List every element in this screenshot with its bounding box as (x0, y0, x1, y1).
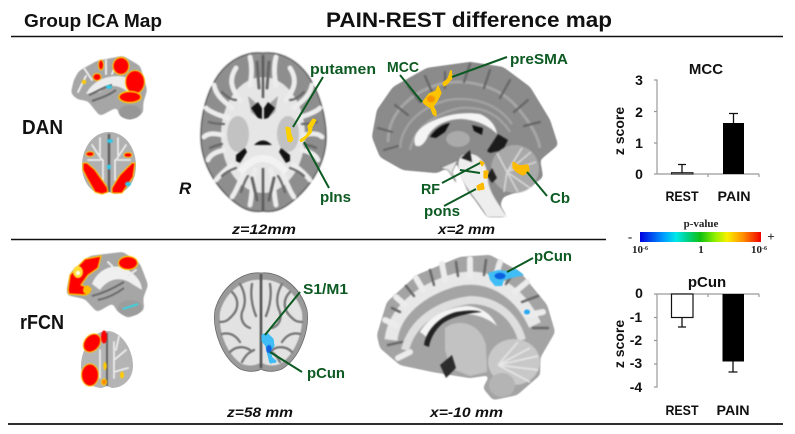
annotation: pons (424, 189, 476, 220)
bar chart: MCC: 1 (635, 135, 643, 151)
bar chart: MCC: 0 (635, 166, 643, 182)
legend: p-value colour bar: + (767, 229, 775, 244)
row label: rFCN: rFCN (20, 312, 64, 334)
activation: S1/M1 and pCun (262, 333, 276, 363)
brain: sagittal slice x=2 mm (372, 62, 558, 217)
legend: p-value colour bar (628, 218, 775, 256)
bar chart: MCC: z score (611, 107, 627, 155)
annotation: pCun sagittal (507, 248, 572, 272)
annotation: pIns (304, 142, 351, 206)
legend: p-value colour bar: - (628, 229, 632, 244)
annotation: S1/M1 (265, 281, 348, 335)
annotation: preSMA: preSMA (510, 51, 568, 68)
activation: brainstem and cerebellum (477, 161, 529, 190)
annotation: MCC: MCC (387, 59, 419, 76)
bar chart: pCun: pCun (688, 274, 726, 291)
icon: rFCN group ICA sagittal brain (67, 252, 148, 318)
icon: DAN group ICA axial brain (82, 132, 136, 194)
bar chart: pCun: 0 (635, 285, 643, 301)
annotation: RF (421, 163, 480, 198)
icon: rFCN group ICA axial brain (80, 330, 133, 388)
annotation: Cb: Cb (550, 190, 570, 207)
legend: p-value colour bar: -6 (643, 246, 648, 252)
bar chart: MCC: REST (666, 188, 699, 204)
brain: sagittal slice x=-10 mm (377, 255, 555, 400)
bar chart: MCC: PAIN (718, 188, 750, 204)
activation: pCun sagittal (488, 269, 530, 314)
caption: z=58 mm: z=58 mm (226, 405, 293, 420)
bar chart: pCun: REST (666, 402, 699, 418)
orientation label: R: R (179, 179, 192, 198)
heading: PAIN-REST difference map: PAIN-REST difference map (326, 9, 612, 32)
bar chart: MCC (611, 61, 759, 204)
bar chart: pCun: -2 (630, 332, 642, 348)
annotation: S1/M1: S1/M1 (303, 281, 348, 298)
caption: z=12mm: z=12mm (231, 222, 296, 237)
bar chart: MCC: 2 (635, 104, 643, 120)
caption: x=2 mm: x=2 mm (437, 222, 495, 237)
brain: axial slice z=12mm (201, 53, 326, 211)
bar chart: pCun (611, 274, 759, 418)
annotation: pIns: pIns (320, 189, 351, 206)
annotation: Cb (527, 172, 570, 207)
bar chart: MCC: 3 (635, 72, 643, 88)
bar chart: pCun: PAIN (716, 402, 750, 418)
caption: x=-10 mm: x=-10 mm (429, 405, 503, 420)
brain: axial slice z=58 mm (214, 273, 308, 371)
heading: Group ICA Map: Group ICA Map (24, 11, 162, 31)
legend: p-value colour bar: p-value (684, 218, 719, 230)
activation: MCC and preSMA (423, 70, 452, 116)
activation: putamen and insula (286, 119, 316, 142)
annotation: pons: pons (424, 203, 460, 220)
bar chart: pCun: -1 (630, 309, 642, 325)
annotation: pCun axial (270, 352, 345, 382)
legend: p-value colour bar: 10 (751, 244, 762, 256)
annotation: preSMA (452, 51, 568, 77)
legend: p-value colour bar: -6 (762, 246, 767, 252)
bar chart: pCun: -3 (630, 355, 642, 371)
annotation: pCun sagittal: pCun (534, 248, 572, 265)
icon: DAN group ICA sagittal brain (71, 56, 147, 120)
annotation: MCC (387, 59, 422, 102)
annotation: RF: RF (421, 181, 440, 198)
annotation: putamen: putamen (310, 61, 376, 78)
legend: p-value colour bar: 10 (632, 244, 643, 256)
row label: DAN: DAN (22, 117, 63, 139)
annotation: pCun axial: pCun (307, 365, 345, 382)
bar chart: pCun: -4 (630, 379, 642, 395)
legend: p-value colour bar: 1 (698, 244, 704, 256)
annotation: putamen (293, 61, 376, 127)
bar chart: MCC: MCC (689, 61, 723, 78)
bar chart: pCun: z score (611, 320, 627, 368)
